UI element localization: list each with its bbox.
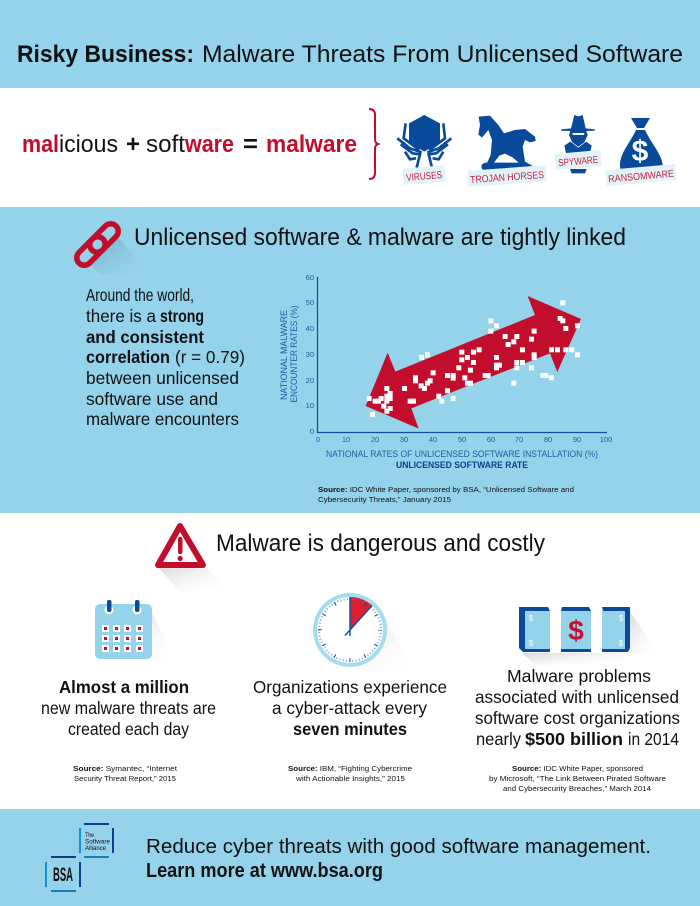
- scatter chart: [279, 273, 612, 470]
- text block: cyber-attack: a cyber-attack every: [272, 698, 427, 718]
- icon: clock: [313, 593, 414, 672]
- icon: warning triangle: [157, 526, 228, 592]
- text block: cyber-attack: [253, 677, 447, 739]
- text block: correlation: there is a: [86, 306, 156, 326]
- logo: BSA: Software: [85, 838, 110, 846]
- y axis label: NATIONAL MALWARE: [279, 310, 289, 400]
- y axis ticks: 40: [306, 324, 314, 333]
- label: spyware: [554, 150, 602, 170]
- source: microsoft: Source: IDC White Paper, sponsored: [512, 766, 643, 773]
- x axis ticks: 100: [600, 435, 612, 444]
- logo: BSA: The: [85, 832, 94, 839]
- text block: almost a million: new malware threats are: [41, 698, 216, 718]
- x axis label: NATIONAL RATES OF UNLICENSED SOFTWARE INSTALLATION (%): [326, 449, 598, 459]
- text block: cost: $500 billion: [525, 729, 623, 749]
- y axis ticks: 60: [306, 273, 314, 282]
- text block: cost: [475, 666, 680, 749]
- icon: dollar bills: $: [568, 615, 584, 646]
- y axis label: ENCOUNTER RATES (%): [289, 306, 299, 402]
- y axis ticks: 30: [306, 350, 314, 359]
- text block: correlation: between unlicensed: [86, 368, 239, 388]
- icon: dollar bills: $: [619, 614, 624, 623]
- footer call to action: Reduce cyber threats with good software management.: [146, 835, 651, 858]
- icon: dollar bills: $: [529, 639, 534, 648]
- data points: [367, 300, 580, 417]
- y axis ticks: 50: [306, 298, 314, 307]
- label: spyware: SPYWARE: [558, 155, 599, 169]
- text block: cost: in 2014: [628, 729, 679, 749]
- icon: trojan horse: [478, 116, 536, 170]
- text block: almost a million: [41, 677, 216, 739]
- source: ibm: with Actionable Insights,” 2015: [295, 776, 405, 783]
- header band: [0, 0, 700, 88]
- source: chart: Cybersecurity Threats,” January 2015: [318, 495, 451, 504]
- source: symantec: Source: Symantec, “Internet: [73, 766, 177, 773]
- equation: malicious + software = malware: +: [126, 131, 140, 158]
- label: trojan horses: TROJAN HORSES: [470, 170, 545, 186]
- x axis subtitle: UNLICENSED SOFTWARE RATE: [396, 460, 528, 470]
- logo: BSA: Alliance: [85, 845, 106, 852]
- text block: cyber-attack: Organizations experience: [253, 677, 447, 697]
- heading: tightly linked: Unlicensed software & malware are tightly linked: [134, 224, 626, 251]
- source: ibm: [288, 766, 412, 783]
- text block: correlation: (r = 0.79): [175, 347, 245, 367]
- equation: malicious + software = malware: soft: [146, 131, 185, 158]
- double-headed red arrow: [366, 296, 581, 429]
- heading: dangerous and costly: Malware is dangerous and costly: [216, 530, 545, 557]
- label: viruses: VIRUSES: [406, 170, 443, 184]
- x axis ticks: 70: [515, 435, 523, 444]
- icon: calendar: [95, 600, 176, 662]
- x axis ticks: [316, 435, 612, 444]
- text block: cost: Malware problems: [507, 666, 651, 686]
- footer call to action: Learn more at www.bsa.org: [146, 859, 383, 882]
- text block: correlation: and consistent: [86, 327, 204, 347]
- y axis ticks: 0: [310, 427, 314, 436]
- equation: malicious + software = malware: mal: [22, 131, 59, 158]
- y axis ticks: [306, 273, 314, 436]
- equation: malicious + software = malware: ware: [184, 131, 234, 158]
- x axis ticks: 60: [487, 435, 495, 444]
- label: ransomware: RANSOMWARE: [608, 169, 675, 185]
- icon: virus spider: [397, 115, 451, 168]
- x axis ticks: 10: [342, 435, 350, 444]
- text block: correlation: [86, 285, 245, 429]
- source: chart: Source: IDC White Paper, sponsored by BSA, “Unlicensed Software and: [318, 485, 574, 494]
- icon: dollar bills: $: [529, 614, 534, 623]
- panel: dangers band: [0, 513, 700, 809]
- logo: BSA: [46, 824, 113, 891]
- label: viruses: [402, 165, 446, 185]
- y axis ticks: 20: [306, 376, 314, 385]
- text block: correlation: correlation: [86, 347, 170, 367]
- x axis ticks: 80: [544, 435, 552, 444]
- footer band: [0, 809, 700, 906]
- panel: definition band: [0, 88, 700, 207]
- source: microsoft: [489, 766, 666, 793]
- equation: malicious + software = malware: icious: [59, 131, 118, 158]
- text block: correlation: Around the world,: [86, 285, 194, 305]
- title: Malware Threats From Unlicensed Software: [202, 41, 683, 68]
- icon: spy: [561, 115, 595, 173]
- x axis ticks: 0: [316, 435, 320, 444]
- text block: cyber-attack: seven minutes: [293, 719, 407, 739]
- source: microsoft: by Microsoft, “The Link Between Pirated Software: [489, 776, 666, 783]
- icon: money bag: $: [632, 135, 649, 168]
- footer call to action: [146, 835, 651, 882]
- panel: correlation band: [0, 207, 700, 513]
- text block: cost: software cost organizations: [475, 708, 680, 728]
- source: chart: [318, 485, 574, 504]
- x axis ticks: 40: [429, 435, 437, 444]
- icon: dollar bills: $: [619, 639, 624, 648]
- equation: malicious + software = malware: malware: [266, 131, 357, 158]
- x axis ticks: 50: [458, 435, 466, 444]
- text block: almost a million: created each day: [68, 719, 189, 739]
- x axis ticks: 90: [573, 435, 581, 444]
- equation: malicious + software = malware: =: [243, 131, 258, 158]
- text block: correlation: malware encounters: [86, 409, 239, 429]
- chart axes: [318, 277, 607, 432]
- text block: correlation: software use and: [86, 389, 218, 409]
- text block: correlation: strong: [160, 306, 204, 326]
- title: Risky Business:: [17, 41, 194, 68]
- red brace: [369, 109, 378, 179]
- x axis ticks: 30: [400, 435, 408, 444]
- text block: cost: associated with unlicensed: [475, 687, 679, 707]
- logo: BSA: BSA: [53, 865, 73, 886]
- icon: dollar bills: [519, 607, 660, 665]
- source: symantec: [73, 766, 177, 783]
- y axis ticks: 10: [306, 401, 314, 410]
- source: microsoft: and Cybersecurity Breaches,” March 2014: [503, 786, 651, 793]
- source: symantec: Security Threat Report,” 2015: [74, 776, 176, 783]
- icon: money bag: [620, 118, 663, 173]
- x axis ticks: 20: [371, 435, 379, 444]
- source: ibm: Source: IBM, “Fighting Cybercrime: [288, 766, 412, 773]
- equation: malicious + software = malware: [22, 131, 357, 158]
- text block: cost: nearly: [476, 729, 521, 749]
- y axis label: [279, 306, 299, 402]
- text block: almost a million: Almost a million: [59, 677, 189, 697]
- icon: chain link: [74, 221, 147, 276]
